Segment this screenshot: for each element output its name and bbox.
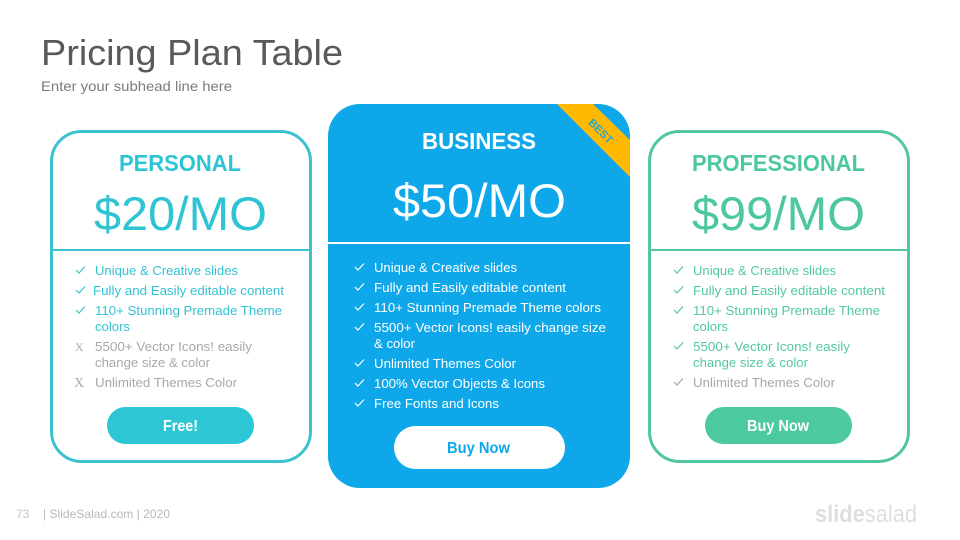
feature list: business: Unique & Creative slides — [374, 260, 517, 275]
price: business: $50/MO — [393, 174, 566, 227]
button: free: Free! — [163, 418, 198, 435]
panel: professional plan — [649, 132, 909, 462]
feature list: personal: change size & color — [95, 355, 211, 370]
button: buy now professional: Buy Now — [747, 418, 809, 435]
feature list: professional: Unique & Creative slides — [693, 263, 836, 278]
heading: personal: PERSONAL — [119, 150, 241, 176]
feature list: business: & color — [374, 336, 416, 351]
feature list: business: Fully and Easily editable content — [374, 280, 566, 295]
heading: business: BUSINESS — [422, 128, 536, 154]
feature list: personal: 110+ Stunning Premade Theme — [95, 303, 282, 318]
button: free — [107, 407, 254, 444]
feature list: professional: Unlimited Themes Color — [693, 375, 836, 390]
card background — [328, 104, 630, 488]
feature list: professional: 5500+ Vector Icons! easily — [693, 339, 851, 354]
feature list: personal: colors — [95, 319, 130, 334]
feature list: personal: X — [74, 376, 84, 391]
feature list: business: 5500+ Vector Icons! easily change size — [374, 320, 606, 335]
panel: personal plan — [51, 132, 311, 462]
logo: slidesalad: slidesalad — [815, 501, 917, 528]
feature list: professional: Fully and Easily editable content — [693, 283, 885, 298]
feature list: professional — [674, 263, 885, 390]
feature list: professional: colors — [693, 319, 728, 334]
card outline — [650, 132, 908, 462]
title: Pricing Plan Table — [41, 32, 343, 73]
heading: professional: PROFESSIONAL — [692, 150, 865, 176]
button: buy now business — [394, 426, 565, 469]
feature list: business: 100% Vector Objects & Icons — [374, 376, 545, 391]
feature list: business — [355, 260, 606, 411]
feature list: personal: X — [75, 340, 84, 354]
price: professional: $99/MO — [692, 187, 865, 240]
button: buy now professional — [705, 407, 852, 444]
panel: business plan — [328, 104, 630, 488]
button: buy now business: Buy Now — [447, 440, 511, 457]
feature list: professional: 110+ Stunning Premade Theme — [693, 303, 880, 318]
card outline — [52, 132, 310, 462]
feature list: business: Unlimited Themes Color — [374, 356, 517, 371]
footer: page number: 73 — [16, 507, 30, 521]
feature list: personal: Fully and Easily editable content — [93, 283, 284, 298]
feature list: business: 110+ Stunning Premade Theme colors — [374, 300, 601, 315]
price: personal: $20/MO — [94, 187, 267, 240]
feature list: professional: change size & color — [693, 355, 809, 370]
ribbon: best: BEST — [585, 117, 615, 147]
feature list: business: Free Fonts and Icons — [374, 396, 500, 411]
feature list: personal: Unlimited Themes Color — [95, 375, 238, 390]
footer: source: | SlideSalad.com | 2020 — [43, 507, 170, 521]
ribbon: best — [557, 104, 630, 177]
feature list: personal: 5500+ Vector Icons! easily — [95, 339, 253, 354]
subhead: Enter your subhead line here — [41, 78, 232, 94]
feature list: personal: Unique & Creative slides — [95, 263, 238, 278]
feature list: personal — [74, 263, 284, 391]
